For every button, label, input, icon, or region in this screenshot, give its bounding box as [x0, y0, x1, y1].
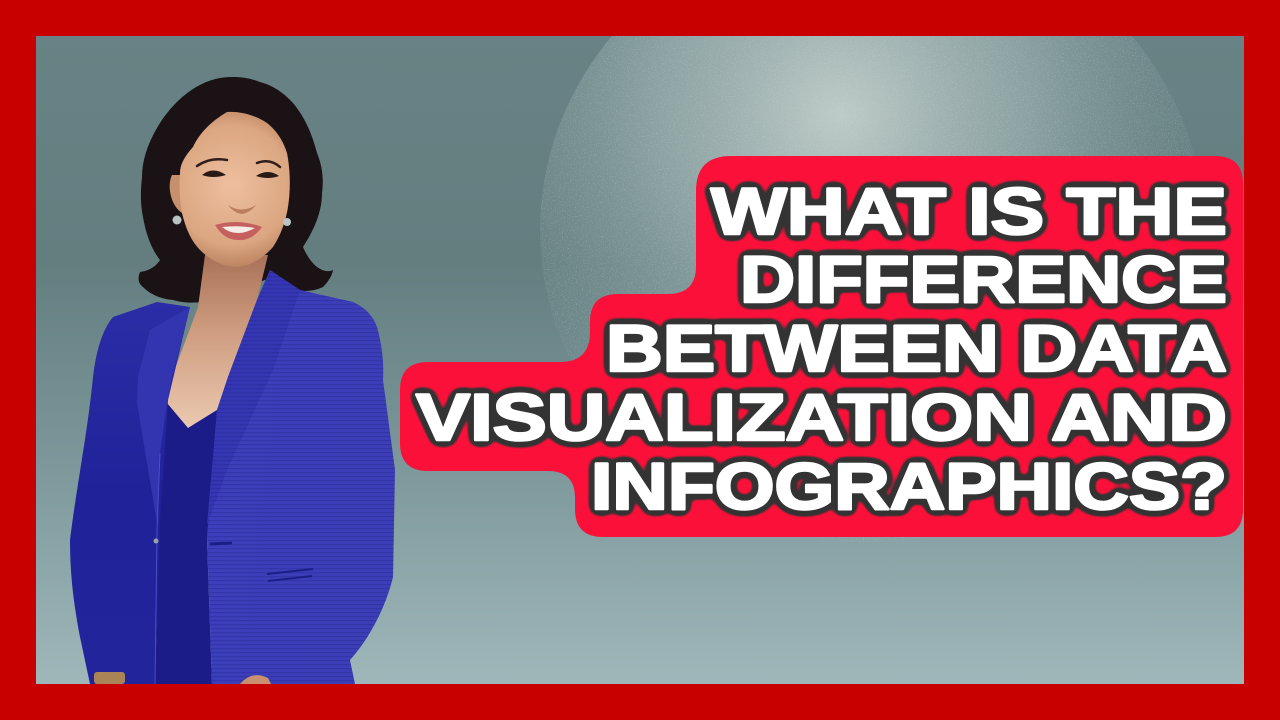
jacket right side: [207, 270, 395, 684]
presenter portrait: [70, 77, 395, 684]
left ear: [170, 175, 182, 213]
eyebrows: [197, 159, 280, 167]
jacket left side: [70, 302, 190, 684]
jacket rib texture: [207, 270, 395, 684]
neck and chest: [167, 255, 268, 428]
hair: [139, 77, 333, 303]
title callout: [400, 156, 1243, 537]
face: [180, 112, 290, 267]
watch: [94, 672, 125, 684]
red label shape: [400, 156, 1243, 537]
inner top: [155, 403, 222, 684]
heading text: DIFFERENCE: [740, 242, 1227, 316]
heading text: INFOGRAPHICS?: [591, 449, 1227, 523]
left lapel: [137, 307, 190, 523]
heading text: WHAT IS THE: [711, 174, 1227, 248]
hand: [240, 675, 271, 684]
heading text: VISUALIZATION AND: [416, 380, 1227, 454]
nose: [228, 205, 256, 214]
heading text: [416, 174, 1227, 523]
eyes: [202, 170, 279, 178]
earrings: [172, 216, 291, 226]
heading text: BETWEEN DATA: [606, 311, 1227, 385]
smile: [215, 222, 262, 240]
jacket details: [155, 453, 313, 684]
jacket button: [154, 538, 158, 544]
right lapel: [207, 270, 300, 525]
